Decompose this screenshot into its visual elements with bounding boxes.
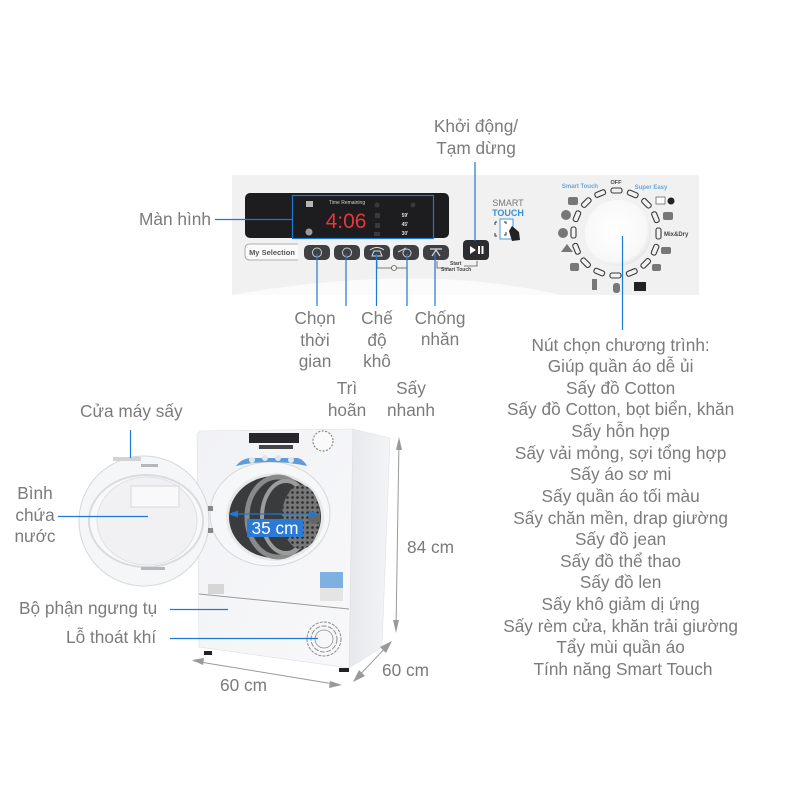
door and part leader lines — [58, 430, 318, 638]
arrow: width — [192, 658, 342, 688]
program list: Sấy rèm cửa, khăn trải giường — [503, 616, 738, 636]
program dial: OFF — [610, 180, 622, 186]
display screen: 45' — [402, 222, 408, 228]
label: bình chứa nước: Bình — [17, 483, 53, 503]
program list: Sấy quần áo tối màu — [541, 486, 700, 506]
top controls — [249, 431, 333, 451]
arrow: depth — [353, 641, 392, 682]
program dial: Mix&Dry — [664, 232, 689, 238]
start smart touch label — [441, 261, 471, 273]
door — [79, 456, 213, 586]
vent — [307, 622, 341, 656]
buttons row — [304, 245, 449, 260]
35 cm dimension — [228, 510, 319, 538]
label: chọn thời gian: Chọn — [294, 308, 336, 328]
button link symbol — [377, 261, 449, 270]
program list: Sấy đồ jean — [575, 529, 666, 549]
program list: Sấy hỗn hợp — [571, 421, 670, 441]
front instruction sticker — [208, 584, 224, 594]
label: chống nhăn: nhăn — [421, 329, 459, 349]
start pause button — [463, 240, 489, 266]
smart touch logo — [492, 198, 524, 241]
label: sấy nhanh: Sấy — [396, 378, 426, 398]
dryer body — [197, 429, 390, 672]
label: 60 cm width: 60 cm — [220, 675, 267, 695]
program list: Sấy vải mỏng, sợi tổng hợp — [515, 443, 726, 463]
program list: Sấy đồ len — [580, 572, 661, 592]
label: khởi động: Tạm dừng — [436, 138, 516, 158]
smart touch logo: SMART — [492, 198, 524, 208]
label: chế độ khô: độ — [367, 330, 387, 350]
label: chọn thời gian: thời — [300, 330, 330, 350]
my selection button — [245, 244, 298, 260]
program list: Sấy khô giảm dị ứng — [541, 594, 700, 614]
label: khởi động: Khởi động/ — [434, 116, 518, 136]
program list: Sấy chăn mền, drap giường — [513, 508, 728, 528]
energy label — [320, 572, 343, 601]
display screen: 59' — [402, 213, 408, 219]
program dial — [558, 180, 689, 293]
control panel — [232, 175, 699, 295]
start smart touch label: Start — [450, 261, 462, 267]
display screen: Time Remaining — [329, 200, 365, 206]
label: 60 cm depth: 60 cm — [382, 660, 429, 680]
label: chế độ khô: Chế — [361, 308, 393, 328]
label: chế độ khô: khô — [363, 351, 391, 371]
program list: Giúp quần áo dễ ủi — [548, 356, 694, 376]
program dial: Smart Touch — [562, 184, 598, 190]
smart touch logo: TOUCH — [492, 208, 524, 218]
blue band — [236, 455, 307, 466]
label: trì hoãn: Trì — [337, 378, 357, 398]
start smart touch label: Smart Touch — [441, 267, 471, 273]
label: cửa máy sấy: Cửa máy sấy — [80, 401, 183, 421]
drum opening — [210, 462, 330, 566]
label: màn hình: Màn hình — [139, 209, 211, 229]
my selection button: My Selection — [249, 248, 295, 257]
arrow: height — [393, 437, 402, 633]
program list: Sấy đồ thể thao — [560, 551, 681, 571]
label: chống nhăn: Chống — [415, 308, 465, 328]
label: bình chứa nước: nước — [14, 526, 56, 546]
label: chọn thời gian: gian — [299, 351, 331, 371]
program dial: Super Easy — [635, 185, 668, 191]
program list: Sấy áo sơ mi — [570, 464, 671, 484]
label lines for panel — [215, 162, 622, 330]
display screen — [245, 193, 449, 238]
program list: Nút chọn chương trình: — [532, 335, 710, 355]
program list: Tính năng Smart Touch — [534, 659, 712, 679]
label: trì hoãn: hoãn — [328, 400, 366, 420]
label: sấy nhanh: nhanh — [387, 400, 435, 420]
35 cm dimension: 35 cm — [252, 518, 298, 538]
label: lỗ thoát khí: Lỗ thoát khí — [66, 627, 156, 647]
program list: Sấy đồ Cotton — [566, 378, 675, 398]
program list: Tẩy mùi quần áo — [556, 637, 685, 657]
program list: Sấy đồ Cotton, bọt biển, khăn — [507, 399, 734, 419]
display screen: 4:06 — [326, 210, 366, 233]
label: bình chứa nước: chứa — [15, 505, 55, 525]
label: bộ phận ngưng tụ: Bộ phận ngưng tụ — [19, 598, 157, 618]
label: 84 cm: 84 cm — [407, 537, 454, 557]
display screen: 30' — [402, 231, 408, 237]
